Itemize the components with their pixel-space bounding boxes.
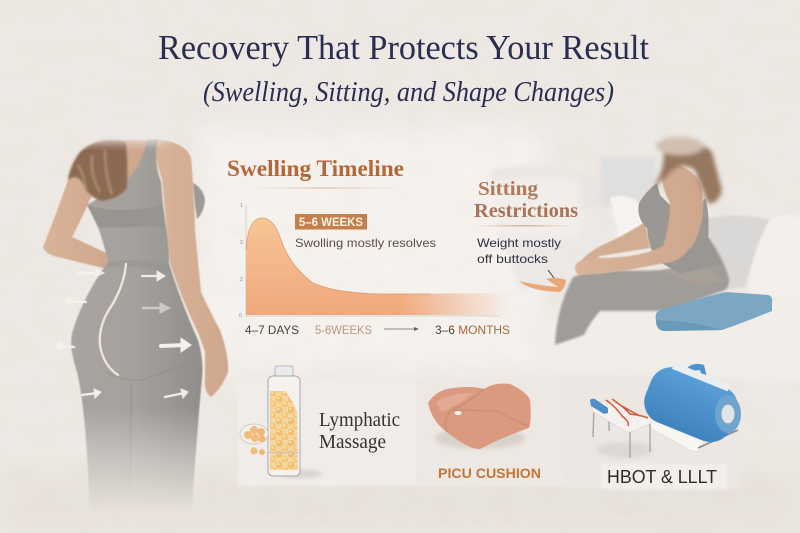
- heading: sitting restrictions: Restrictions: [474, 200, 578, 222]
- heading: sitting restrictions: [465, 178, 580, 238]
- chart: swelling curve: 2: [240, 277, 243, 283]
- label: lymphatic massage: Lymphatic: [319, 409, 400, 431]
- hair: [68, 140, 127, 201]
- panel: swelling timeline: [227, 156, 510, 337]
- callout: 5-6 weeks: Swolling mostly resolves: [295, 236, 436, 250]
- panel: hbot and lllt: [565, 357, 746, 489]
- blue cushion: [656, 292, 772, 331]
- panel: lymphatic massage: [238, 366, 417, 486]
- chart: swelling curve: 3: [240, 240, 243, 246]
- panel: sitting restrictions: [465, 178, 580, 292]
- timeline axis labels: 4–7 DAYS: [245, 323, 299, 337]
- heading: sitting restrictions: Sitting: [478, 178, 539, 200]
- timeline axis labels: 3–6 MONTHS: [435, 323, 510, 337]
- subtitle: (Swelling, Sitting, and Shape Changes): [203, 77, 614, 108]
- timeline axis labels: 5-6WEEKS: [315, 323, 372, 337]
- chart: swelling curve: [239, 203, 510, 319]
- chart: swelling curve: 1: [240, 203, 243, 209]
- swelling arrows: [55, 269, 191, 398]
- figure: garment: [71, 139, 205, 533]
- icon: white roll: [651, 416, 704, 452]
- icon: sitting pointer squiggle: [519, 270, 566, 292]
- head fade: [85, 138, 171, 150]
- callout: 5-6 weeks: [295, 214, 436, 250]
- callout: 5-6 weeks: 5–6 WEEKS: [299, 217, 363, 229]
- seam line: [100, 264, 126, 375]
- icon: cushion: [428, 384, 531, 449]
- timeline axis labels: [245, 323, 510, 337]
- icon: dish of beads: [240, 424, 268, 455]
- icon: treatment table: [590, 399, 653, 458]
- label: lymphatic massage: Massage: [319, 431, 386, 453]
- icon: blue blower: [638, 357, 746, 449]
- text: weight mostly off buttocks: Weight mostly: [477, 236, 561, 250]
- text: weight mostly off buttocks: [477, 236, 561, 266]
- figure: skin and arms: [43, 139, 228, 397]
- heading: swelling timeline: Swelling Timeline: [227, 156, 404, 181]
- leggings: [555, 237, 729, 345]
- front arm and hand: [575, 163, 703, 275]
- chart: swelling curve: 0: [239, 313, 242, 319]
- label: hbot and lllt: HBOT & LLLT: [607, 467, 717, 487]
- panel: picu cushion: [418, 378, 565, 486]
- back view figure in compression garment: [42, 138, 229, 502]
- sofa and pillows: [490, 157, 800, 380]
- back arm: [580, 222, 650, 263]
- label: picu cushion: PICU CUSHION: [438, 465, 541, 481]
- icon: bottle of beads: [240, 366, 322, 478]
- seated figure on sofa: [490, 137, 800, 380]
- title: Recovery That Protects Your Result: [158, 28, 649, 67]
- tank top: [638, 183, 709, 270]
- label: lymphatic massage: [319, 409, 400, 453]
- text: weight mostly off buttocks: off buttocks: [477, 252, 548, 266]
- hair: [652, 137, 722, 203]
